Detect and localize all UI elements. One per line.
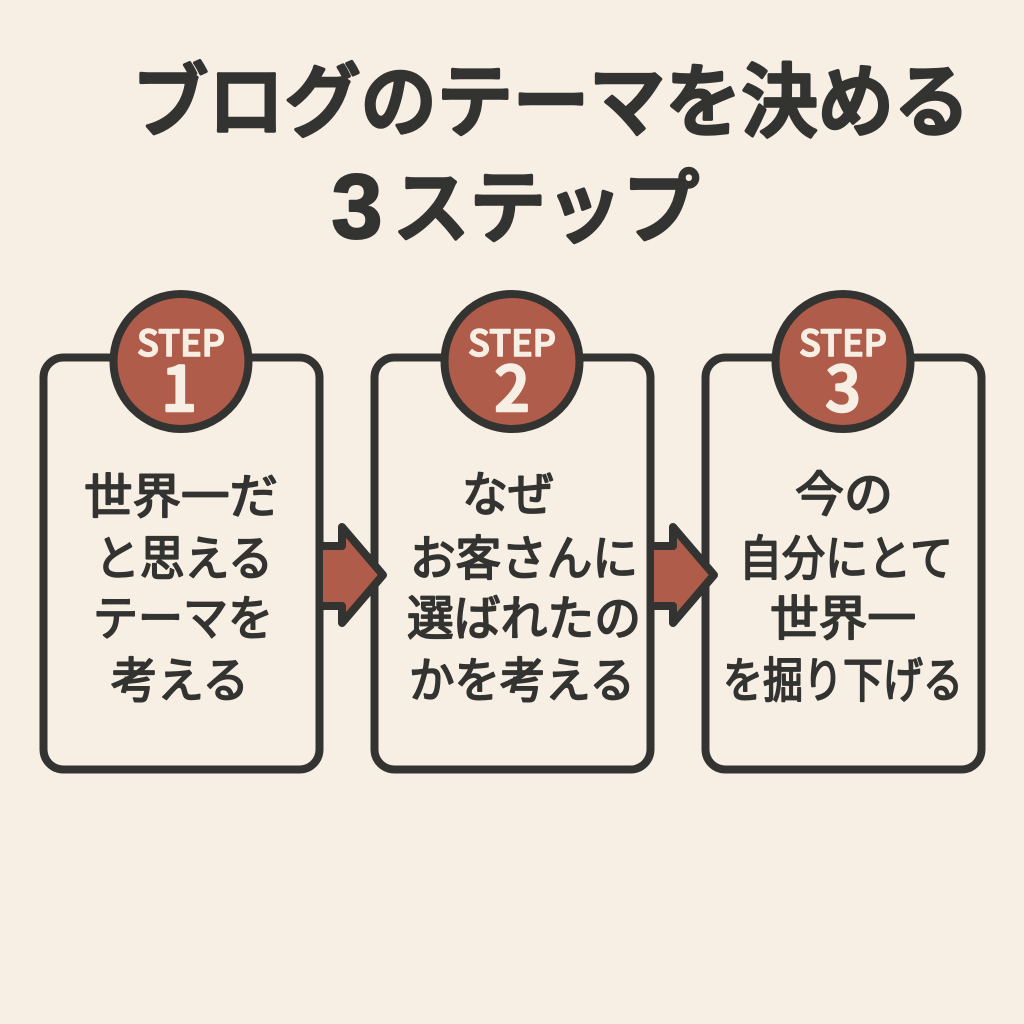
text: step 3 — [723, 469, 963, 708]
badge: step 2: STEP — [468, 315, 556, 367]
badge: step 3: STEP — [799, 315, 887, 367]
title: 3 — [331, 156, 383, 258]
text: step 2: 選ばれたの — [407, 593, 641, 646]
text: step 3: を掘り下げる — [723, 655, 963, 708]
panel: step 1 — [44, 294, 320, 770]
badge: step 1: 1 — [161, 339, 197, 429]
badge: step 3: 3 — [825, 339, 861, 429]
text: step 1: 世界一だ — [84, 471, 278, 524]
text: step 3: 世界一 — [770, 593, 916, 646]
text: step 2 — [407, 469, 641, 708]
text: step 1 — [84, 471, 278, 708]
text: step 1: テーマを — [93, 593, 273, 646]
arrow: step 2 to 3 — [654, 527, 714, 623]
text: step 1: と思える — [95, 533, 273, 586]
badge: step 2 — [444, 294, 580, 429]
arrow: step 1 to 2 — [323, 527, 383, 623]
badge: step 1 — [114, 294, 248, 429]
badge: step 3 — [776, 294, 910, 429]
text: step 2: かを考える — [409, 655, 635, 708]
text: step 1: 考える — [111, 655, 249, 708]
text: step 2: なぜ — [462, 469, 554, 522]
title — [132, 58, 970, 258]
badge: step 1: STEP — [137, 315, 225, 367]
title: ブログのテーマを決める — [132, 58, 970, 147]
title: ステップ — [393, 164, 699, 253]
text: step 2: お客さんに — [410, 533, 638, 586]
text: step 3: 自分にとて — [739, 533, 953, 586]
badge: step 2: 2 — [494, 339, 530, 429]
panel: step 3 — [706, 294, 982, 770]
text: step 3: 今の — [795, 469, 893, 522]
panel: step 2 — [374, 294, 650, 770]
